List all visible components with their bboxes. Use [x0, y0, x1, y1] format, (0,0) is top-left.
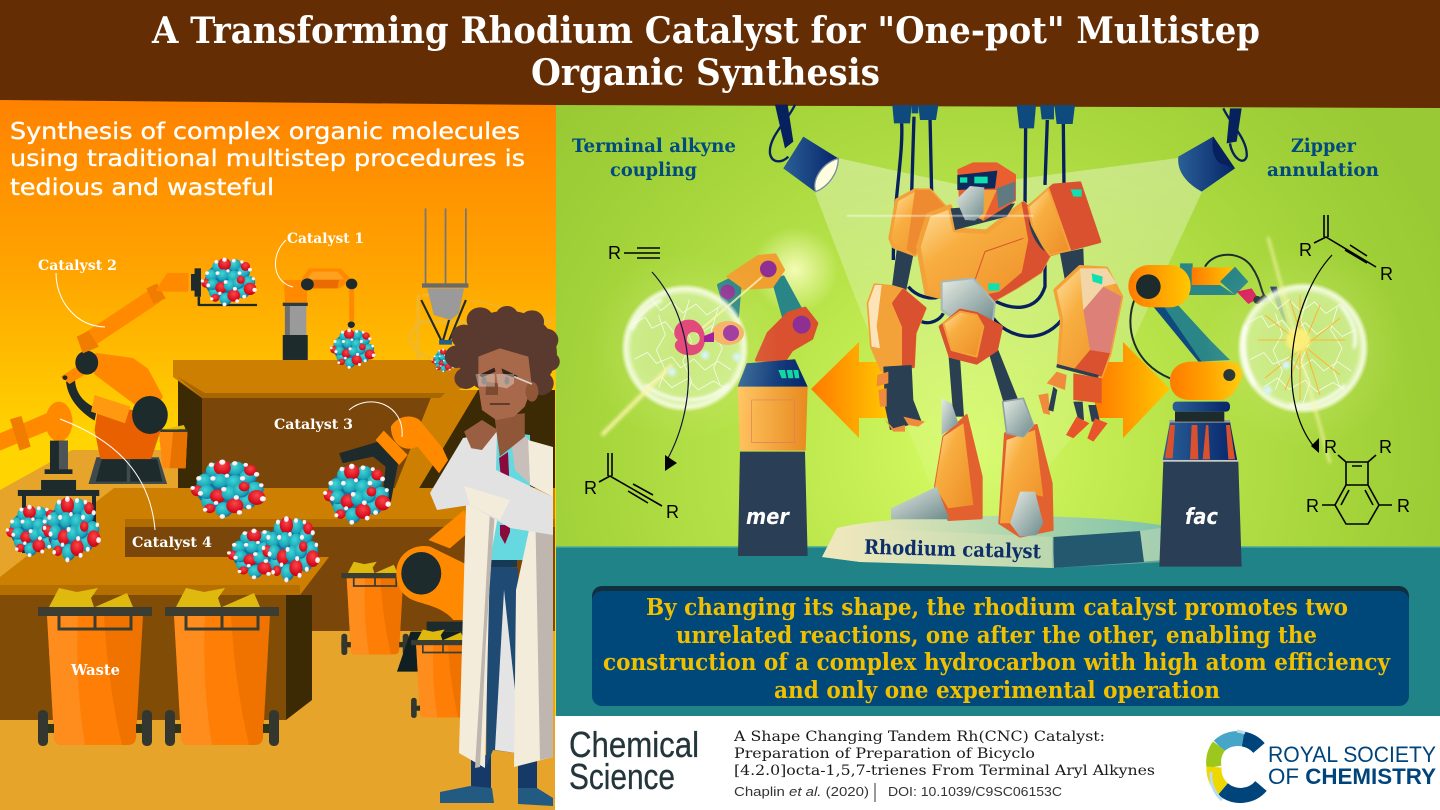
- reaction sphere left: [590, 253, 780, 443]
- scientist: [430, 306, 560, 806]
- molecule: centre: [190, 459, 266, 519]
- glow: [752, 227, 838, 313]
- left arm: [868, 250, 925, 432]
- top table: [173, 360, 555, 490]
- label: fac: fac: [1185, 505, 1218, 530]
- chemical structure: terminal alkyne: [608, 243, 660, 263]
- article title: [733, 729, 1155, 779]
- fac robot arm with sphere: [1128, 255, 1287, 567]
- platform label: Rhodium catalyst: [864, 535, 1042, 563]
- pelvis: [940, 310, 1002, 363]
- waste bin with label: Waste: [70, 661, 120, 679]
- pedestal: [738, 359, 808, 556]
- chemical structure: bicyclo product: R: [1397, 496, 1410, 516]
- transforming robot: [847, 105, 1122, 537]
- chemical structure: enyne left: R: [666, 502, 679, 522]
- citation: DOI: 10.1039/C9SC06153C: [888, 784, 1062, 799]
- catalyst labels and callout curves: Catalyst 3: [274, 417, 353, 433]
- label: terminal alkyne coupling: [572, 135, 736, 181]
- lab coat: [430, 432, 553, 768]
- catalyst labels and callout curves: Catalyst 1: [287, 231, 364, 247]
- journal name: [569, 724, 699, 797]
- light streak: [847, 215, 1033, 217]
- tool: [674, 320, 705, 355]
- reaction sphere right: [1203, 237, 1403, 463]
- robot arm: catalyst 3: [339, 417, 448, 502]
- left panel heading: tedious and wasteful: [10, 175, 274, 201]
- molecule on catalyst 3: [323, 464, 391, 525]
- article title: A Shape Changing Tandem Rh(CNC) Catalyst:: [733, 729, 1105, 745]
- molecule on catalyst 2: [201, 257, 257, 306]
- curved arrow left: [652, 272, 688, 471]
- title: [151, 10, 1260, 94]
- article title: Preparation of Preparation of Bicyclo: [734, 746, 1035, 762]
- callout: summary box: By changing its shape, the rhodium catalyst promotes two: [646, 594, 1348, 621]
- callout: summary box: and only one experimental operation: [774, 677, 1220, 704]
- article title: [4.2.0]octa-1,5,7-trienes From Terminal Aryl Alkynes: [734, 763, 1155, 779]
- logo: Royal Society of Chemistry: ROYAL SOCIETY: [1268, 742, 1436, 767]
- label: terminal alkyne coupling: Terminal alkyne: [572, 135, 736, 157]
- lower robot arm: [396, 510, 471, 672]
- left panel heading: using traditional multistep procedures is: [10, 146, 525, 172]
- footer: [555, 716, 1440, 810]
- panel: right green stage background: [555, 100, 1440, 718]
- small orange bin on top floor: [159, 425, 187, 468]
- cables and connectors: [892, 105, 1075, 336]
- chemical structure: enyne right: R: [1299, 240, 1312, 260]
- cage with catalyst 4 molecules: [6, 495, 101, 563]
- callout: summary box: construction of a complex hydrocarbon with high atom efficiency: [603, 649, 1391, 676]
- curved arrow right: [1292, 255, 1332, 453]
- left panel heading: [10, 119, 525, 201]
- chemical structure: terminal alkyne: R: [608, 243, 621, 263]
- right arm: [1038, 248, 1122, 442]
- pedestal: [1159, 362, 1242, 567]
- journal name: Chemical: [569, 724, 699, 765]
- citation: [734, 783, 1062, 802]
- header band: [0, 0, 1440, 108]
- waist: [942, 278, 995, 323]
- robot arm: catalyst 4: [0, 402, 99, 496]
- panel: left factory background: [0, 98, 556, 810]
- chemical structure: bicyclo product: R: [1324, 437, 1337, 457]
- lower tables: [0, 488, 555, 720]
- molecule on catalyst 1: [330, 329, 376, 369]
- label: zipper annulation: annulation: [1267, 159, 1379, 181]
- catalyst labels and callout curves: [38, 231, 402, 551]
- logo: Royal Society of Chemistry: OF CHEMISTRY: [1268, 764, 1436, 789]
- robot arm: catalyst 2: [61, 268, 257, 484]
- catalyst labels and callout curves: Catalyst 4: [132, 535, 212, 551]
- big molecule cluster: [227, 516, 320, 583]
- chemical structure: bicyclo product: [1306, 437, 1410, 524]
- chemical structure: enyne right: [1299, 215, 1393, 284]
- chemical structure: bicyclo product: R: [1379, 437, 1392, 457]
- chemical structure: enyne left: [584, 453, 679, 522]
- molecule on delta robot: [431, 349, 460, 372]
- trousers and shoes: [440, 565, 553, 806]
- left panel heading: Synthesis of complex organic molecules: [10, 119, 520, 145]
- head: [445, 306, 560, 457]
- torso: [918, 203, 1052, 300]
- orange arrow right: [1095, 342, 1170, 438]
- left leg: [891, 398, 982, 520]
- label: zipper annulation: [1267, 135, 1379, 181]
- shirt and tie: [489, 430, 530, 560]
- arm: [718, 255, 817, 360]
- label: mer: mer: [746, 505, 790, 530]
- chemical structure: enyne left: R: [584, 478, 597, 498]
- right shoulder: [1028, 183, 1100, 255]
- background machinery outline: [411, 295, 555, 360]
- head: [956, 163, 1015, 221]
- hair: [445, 306, 560, 396]
- rear waste bin: [341, 562, 409, 655]
- journal name: Science: [569, 756, 675, 797]
- waste bin with label: [38, 588, 152, 746]
- label: zipper annulation: Zipper: [1291, 135, 1357, 157]
- waste bin: [165, 588, 279, 746]
- chemical structure: enyne right: R: [1380, 264, 1393, 284]
- robot arm: catalyst 1: [283, 268, 357, 360]
- right leg: [999, 398, 1053, 537]
- catalyst labels and callout curves: Catalyst 2: [38, 258, 117, 274]
- logo: Royal Society of Chemistry: [1211, 731, 1436, 800]
- title: Organic Synthesis: [531, 52, 880, 94]
- chemical structure: bicyclo product: R: [1306, 496, 1319, 516]
- front waste bin: [411, 630, 475, 718]
- legs: [948, 350, 1018, 417]
- mer robot arm with sphere: [718, 227, 838, 556]
- delta robot: [421, 208, 468, 345]
- spot lamp right: [1178, 108, 1247, 192]
- collar: [951, 203, 1015, 230]
- platform: [822, 516, 1170, 568]
- spot lamp left: [770, 105, 838, 192]
- callout: summary box: unrelated reactions, one after the other, enabling the: [676, 622, 1317, 649]
- orange arrow left: [811, 342, 890, 438]
- callout: summary box: [592, 586, 1409, 706]
- citation: Chaplin et al. (2020): [734, 784, 869, 799]
- title: A Transforming Rhodium Catalyst for "One-pot" Multistep: [151, 10, 1260, 52]
- arm: [1128, 263, 1287, 362]
- label: terminal alkyne coupling: coupling: [610, 159, 697, 181]
- left shoulder: [890, 190, 947, 255]
